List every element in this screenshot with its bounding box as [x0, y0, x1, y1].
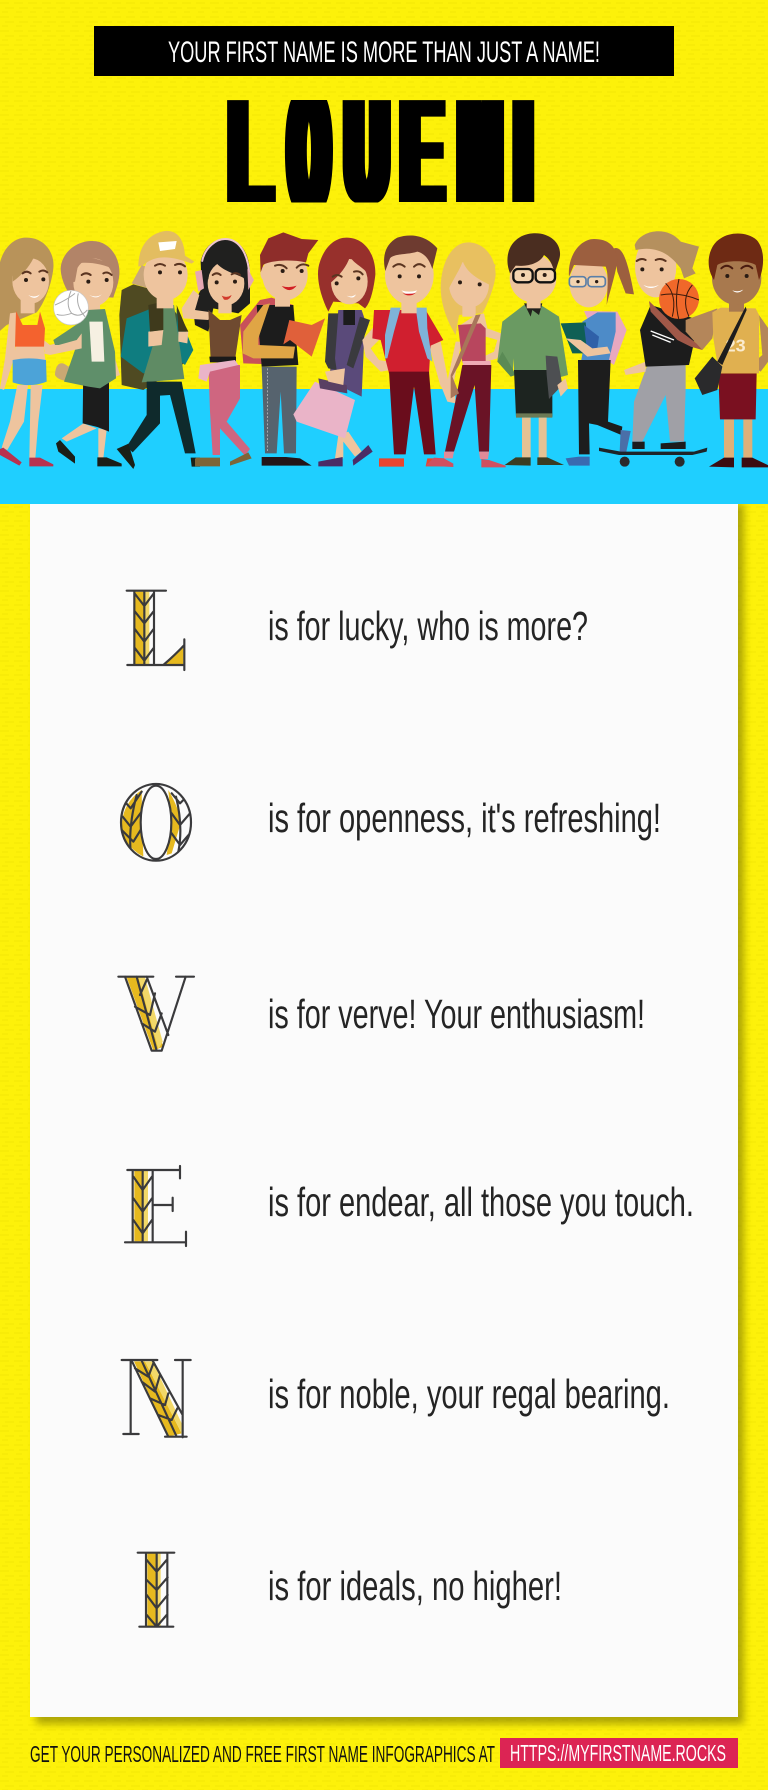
title: name: U [346, 67, 387, 234]
panel: acrostic [30, 504, 738, 1717]
person: boy with tank top and shoulder bag: 23 [726, 336, 746, 356]
person: boy in red shirt [362, 236, 453, 467]
text: I line: is for ideals, no higher! [268, 1563, 562, 1609]
illustration: row of people, left half [0, 231, 375, 469]
title: name: E [401, 69, 443, 235]
illustration: row of people, right half [362, 231, 768, 467]
banner: tagline [94, 26, 674, 76]
person: boy with tank top and shoulder bag [686, 234, 768, 467]
title: name [227, 100, 534, 202]
person: blonde girl [426, 242, 506, 467]
title: name: O [290, 54, 328, 249]
cyan floor band [0, 389, 768, 504]
title: name: N [460, 68, 500, 234]
letter icon: I [138, 1553, 174, 1627]
person: skateboarder with basketball [599, 231, 707, 467]
letter icon: N [122, 1360, 191, 1437]
person: girl in green jacket [43, 241, 122, 466]
person: boy reading a book [240, 232, 325, 466]
letter icon: L [127, 591, 184, 670]
person: boy with glasses and green sweater [497, 233, 568, 466]
person: girl with ponytail and tablet [561, 239, 634, 466]
letter icon: V [118, 977, 194, 1051]
person: girl with pink bag [293, 238, 375, 466]
person: girl with headphones [182, 239, 254, 466]
person: girl in orange top [0, 238, 80, 466]
title: name: L [228, 68, 273, 234]
title: name: I [502, 68, 544, 234]
person: boy with backpack and cap [117, 231, 220, 469]
letter icon: E [125, 1166, 186, 1246]
letter icon: O [121, 784, 191, 861]
text: L line: is for lucky, who is more? [268, 603, 588, 649]
panel shadow [36, 504, 744, 1724]
